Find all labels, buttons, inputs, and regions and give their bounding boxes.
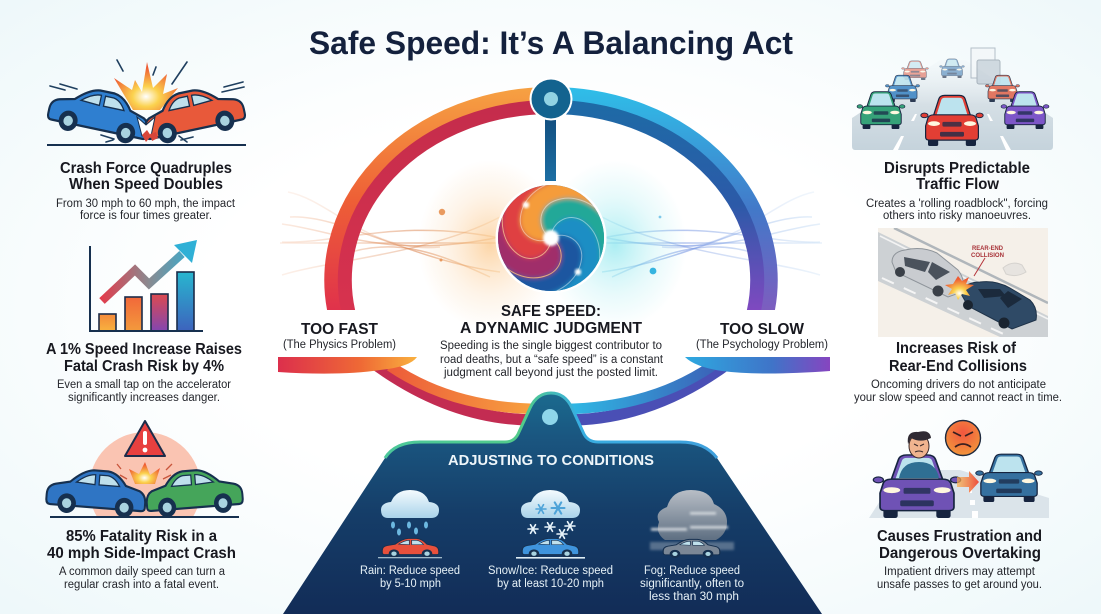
illustration: rear-end collision: COLLISION [971, 253, 1004, 259]
text: 1% speed detail: significantly increases danger. [68, 392, 220, 404]
text: 85% fatality detail: regular crash into a fatal event. [64, 579, 219, 591]
heading: rear-end [889, 340, 1027, 375]
illustration: rear-end collision: REAR-END [972, 246, 1004, 252]
text: frustration detail [877, 566, 1042, 591]
text: snow [488, 565, 613, 590]
title: Safe Speed: It’s A Balancing Act [309, 25, 793, 61]
pivot hub [530, 78, 572, 120]
heading: 85% fatality: 85% Fatality Risk in a [66, 528, 217, 545]
icon: side-impact crash with warning [45, 420, 244, 518]
text: safe speed description: road deaths, but a “safe speed” is a constant [440, 354, 664, 366]
text: rear-end detail: Oncoming drivers do not anticipate [871, 379, 1046, 391]
icon: head-on crash [45, 60, 248, 147]
orb: dynamic judgment [496, 185, 606, 292]
heading: safe speed: A DYNAMIC JUDGMENT [460, 320, 642, 337]
heading: 85% fatality: 40 mph Side-Impact Crash [47, 545, 236, 562]
label: too fast: TOO FAST [301, 321, 378, 338]
chart: rising bars and arrow [89, 240, 203, 332]
text: 85% fatality detail: A common daily speed can turn a [59, 566, 226, 578]
text: safe speed description [440, 340, 664, 379]
heading: 1% speed: A 1% Speed Increase Raises [46, 341, 242, 358]
label: too slow [696, 321, 828, 351]
heading: rear-end: Increases Risk of [896, 340, 1017, 357]
text: traffic flow detail [866, 198, 1048, 222]
left arc: too fast [331, 94, 551, 322]
heading: adjusting: ADJUSTING TO CONDITIONS [448, 452, 654, 469]
heading: safe speed [460, 303, 642, 337]
heading: traffic flow: Disrupts Predictable [884, 160, 1030, 177]
icon: frustrated driver [869, 420, 1049, 518]
text: traffic flow detail: others into risky manoeuvres. [883, 210, 1031, 222]
heading: frustration: Causes Frustration and [877, 528, 1042, 545]
icon: congested traffic [852, 48, 1053, 150]
text: rain [360, 565, 460, 590]
panel: too fast [45, 60, 248, 591]
heading: 1% speed: Fatal Crash Risk by 4% [64, 358, 224, 375]
icon: rain [378, 490, 442, 558]
heading: rear-end: Rear-End Collisions [889, 358, 1027, 375]
label: too slow: TOO SLOW [720, 321, 805, 338]
text: rear-end detail: your slow speed and cannot react in time. [854, 392, 1062, 404]
text: rain: by 5-10 mph [380, 578, 441, 590]
text: fog: significantly, often to [640, 578, 744, 590]
text: rear-end detail [854, 379, 1062, 404]
illustration: rear-end collision [878, 228, 1048, 337]
text: snow: by at least 10-20 mph [497, 578, 604, 590]
panel: adjusting to conditions [283, 393, 822, 614]
pivot knob [542, 409, 558, 425]
text: 85% fatality detail [59, 566, 226, 591]
base outline [385, 393, 717, 458]
icon: snow [516, 490, 585, 559]
label: too fast: (The Physics Problem) [283, 339, 396, 351]
right scale pan [685, 357, 830, 374]
heading: frustration [877, 528, 1042, 562]
heading: 1% speed [46, 341, 242, 375]
text: frustration detail: Impatient drivers may attempt [884, 566, 1036, 578]
text: frustration detail: unsafe passes to get around you. [877, 579, 1042, 591]
label: too fast [283, 321, 396, 351]
heading: crash force: When Speed Doubles [69, 176, 223, 193]
glow behind orb [418, 160, 687, 330]
text: traffic flow detail: Creates a 'rolling roadblock", forcing [866, 198, 1048, 210]
text: crash force detail [56, 198, 236, 222]
heading: frustration: Dangerous Overtaking [879, 545, 1041, 562]
scale base [283, 393, 822, 614]
heading: crash force [60, 160, 232, 193]
heading: 85% fatality [47, 528, 236, 562]
text: fog: less than 30 mph [649, 591, 739, 603]
lower arc [372, 362, 730, 420]
text: safe speed description: Speeding is the single biggest contributor to [440, 340, 662, 352]
heading: traffic flow [884, 160, 1030, 193]
left scale pan [278, 357, 417, 374]
text: crash force detail: From 30 mph to 60 mph, the impact [56, 198, 236, 210]
text: 1% speed detail [57, 379, 231, 404]
text: 1% speed detail: Even a small tap on the accelerator [57, 379, 231, 391]
text: fog [640, 565, 744, 603]
panel: balance scale [278, 78, 830, 420]
heading: traffic flow: Traffic Flow [916, 176, 1000, 193]
panel: too slow [852, 48, 1062, 591]
heading: crash force: Crash Force Quadruples [60, 160, 232, 177]
text: rain: Rain: Reduce speed [360, 565, 460, 577]
pivot stem [545, 113, 556, 181]
text: crash force detail: force is four times greater. [80, 210, 212, 222]
text: fog: Fog: Reduce speed [644, 565, 740, 577]
icon: fog [650, 490, 734, 558]
text: snow: Snow/Ice: Reduce speed [488, 565, 613, 577]
label: too slow: (The Psychology Problem) [696, 339, 828, 351]
right arc: too slow [551, 94, 771, 322]
text: safe speed description: judgment call beyond just the posted limit. [443, 367, 658, 379]
energy waves [280, 192, 822, 277]
heading: safe speed: SAFE SPEED: [501, 303, 601, 320]
